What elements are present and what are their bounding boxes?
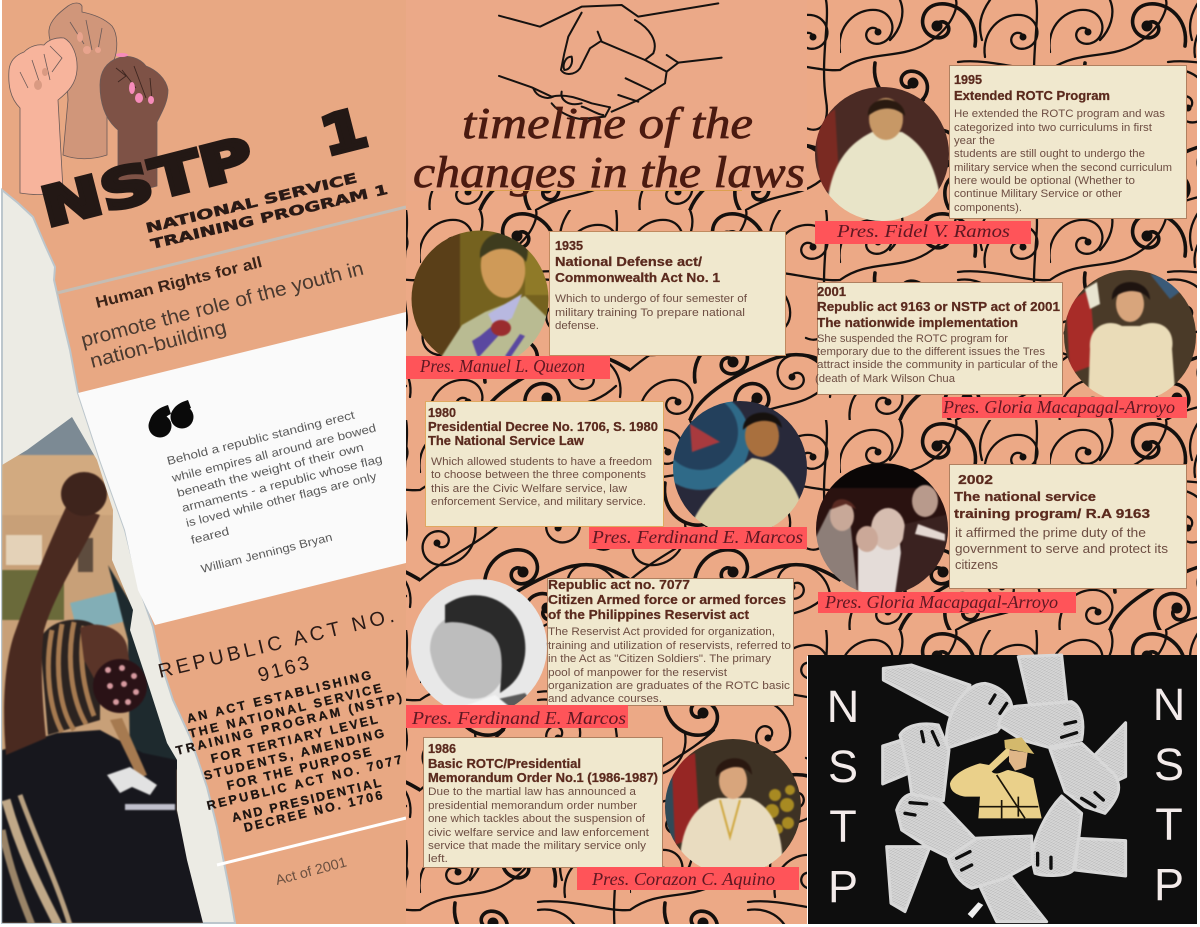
card: text: (death of Mark Wilson Chua [815, 373, 956, 385]
text: NSTP left [827, 681, 859, 912]
divider [57, 207, 406, 293]
card: text: She suspended the ROTC program for [817, 333, 1008, 345]
text: NSTP left: P [828, 861, 858, 912]
card: text [550, 232, 786, 356]
photo: Arroyo oath-taking group [816, 463, 948, 592]
text: act description: STUDENTS, AMENDING [202, 726, 386, 783]
name band: Ramos [815, 221, 1031, 244]
card: text: defense. [555, 320, 599, 332]
heading: human rights for all: Human Rights for all [94, 254, 264, 312]
card: text: training and utilization of reservists, referred to [548, 640, 791, 652]
card: text: presidential memorandum order number [428, 800, 637, 812]
card: text: attract inside the community in particular of the [817, 359, 1058, 371]
card: text: Presidential Decree No. 1706, S. 1980 [428, 420, 658, 434]
card: text: 1935 [555, 239, 583, 253]
card: text: Basic ROTC/Presidential [428, 757, 581, 771]
title: NSTP 1: NSTP [35, 125, 260, 240]
card: Republic act no. 7077 [406, 578, 794, 728]
text: act description: AN ACT ESTABLISHING [185, 668, 372, 726]
card: text: government to serve and protect its [955, 541, 1169, 556]
card: text [950, 66, 1186, 218]
card: text: categorized into two curriculums in first [954, 122, 1152, 134]
subtitle: national service training program [144, 170, 389, 253]
text: quotation: feared [190, 526, 231, 547]
text: act description: REPUBLIC ACT NO. 7077 [205, 753, 403, 813]
card: text: continue Military Service or other [954, 188, 1122, 200]
card: text: Citizen Armed force or armed forces [548, 593, 786, 607]
text: promote the role of the youth: promote the role of the youth in [79, 258, 366, 352]
illustration: linked hands [883, 655, 1126, 922]
card: text: pool of manpower for the reservist [548, 667, 727, 679]
subtitle: national service training program: NATIONAL SERVICE [144, 170, 359, 237]
panel: timeline middle [406, 0, 810, 924]
card: text: citizens [955, 557, 998, 572]
panel: timeline right [807, 0, 1200, 656]
card: text [815, 282, 1062, 394]
card: text: enforcement Service, and military service. [431, 496, 646, 508]
subtitle: national service training program: TRAINING PROGRAM 1 [149, 182, 389, 253]
text: quotation: armaments - a republic whose flag [181, 453, 384, 515]
text: NSTP left: N [827, 681, 859, 732]
card: text: organization are graduates of the ROTC basic [548, 680, 791, 692]
card: text: it affirmed the prime duty of the [955, 525, 1146, 540]
title: timeline of the changes in the laws [413, 99, 805, 197]
card: text [950, 464, 1186, 588]
card: text: The nationwide implementation [817, 316, 1018, 330]
photo: Ferdinand E. Marcos painting [673, 401, 807, 527]
card: text [424, 738, 662, 868]
photo: Manuel L. Quezon [412, 230, 548, 356]
text: act description: FOR THE PURPOSE [225, 745, 373, 793]
card: text: Republic act no. 7077 [548, 578, 690, 592]
card: text: The National Service Law [428, 434, 584, 448]
card: text: temporary due to the different issues the Tres [817, 346, 1046, 358]
name band: Quezon: Pres. Manuel L. Quezon [419, 356, 585, 376]
text: NSTP left: T [829, 801, 857, 852]
card: text: to choose between the three components [431, 469, 647, 481]
card: text: 1986 [428, 742, 456, 756]
text: act description [174, 668, 403, 835]
card: text: 2002 [958, 473, 993, 487]
panel: NSTP black image [808, 655, 1197, 924]
icon: quotation mark [148, 400, 194, 438]
text: NSTP right: S [1154, 739, 1184, 790]
text: quotation: while empires all around are bowed [170, 422, 377, 485]
card: text: here would be optional (Whether to [954, 175, 1135, 187]
card: text: Due to the martial law has announced a [428, 786, 637, 798]
text: promote the role of the youth: nation-building [88, 316, 229, 373]
card: text: Extended ROTC Program [954, 89, 1110, 103]
card: text: 1995 [954, 73, 982, 87]
card: 1980 Marcos [426, 390, 810, 549]
card: 1995 Ramos [810, 66, 1186, 244]
card: text: Republic act 9163 or NSTP act of 2001 [817, 300, 1060, 314]
card: text: this are the Civic Welfare service, law [431, 483, 627, 495]
card: text: The national service [954, 490, 1096, 504]
card: text: components). [954, 202, 1022, 214]
title: NSTP 1 [35, 96, 374, 240]
card: text: training program/ R.A 9163 [954, 507, 1150, 521]
name band: Marcos: Pres. Ferdinand E. Marcos [411, 708, 626, 728]
card: 1935 Quezon [406, 225, 786, 379]
card: text: National Defense act/ [555, 255, 703, 269]
photo: Fidel V. Ramos [815, 87, 949, 221]
text: NSTP right: N [1153, 679, 1185, 730]
panel: left cover [2, 0, 406, 927]
icon: handshake line art [499, 3, 722, 119]
text: NSTP right: T [1155, 799, 1183, 850]
text: act description: DECREE NO. 1706 [242, 788, 384, 835]
card: text [548, 578, 794, 706]
name band: Arroyo: Pres. Gloria Macapagal-Arroyo [824, 592, 1058, 612]
card: 2002 Arroyo [812, 463, 1186, 613]
card: 2001 Arroyo [815, 266, 1200, 418]
title: timeline of the changes in the laws: timeline of the [462, 99, 753, 148]
text: act description: FOR TERTIARY LEVEL [209, 712, 379, 766]
photo: Marcos black and white portrait [411, 579, 547, 705]
card: text: in the Act as "Citizen Soldiers". The primary [548, 653, 772, 665]
title: timeline of the changes in the laws: changes in the laws [413, 148, 805, 197]
card: text: 2001 [817, 285, 846, 299]
name band: Aquino: Pres. Corazon C. Aquino [591, 869, 775, 889]
text: quotation: beneath the weight of their own [176, 442, 365, 500]
title: NSTP 1: 1 [314, 96, 374, 168]
text: act description: THE NATIONAL SERVICE [187, 681, 383, 741]
heading: republic act no. 9163: REPUBLIC ACT NO. [156, 605, 396, 683]
text: quotation: Behold a republic standing erect [166, 409, 357, 468]
card: text: military training To prepare national [555, 307, 745, 319]
card: text: and advance courses. [548, 693, 662, 705]
text: NSTP right [1153, 679, 1185, 910]
text: NSTP left: S [828, 741, 858, 792]
photo: protester with raised fist [2, 417, 203, 923]
card: text: 1980 [428, 406, 456, 420]
name band: Arroyo: Pres. Gloria Macapagal-Arroyo [942, 397, 1175, 417]
name band: Ramos: Pres. Fidel V. Ramos [836, 221, 1010, 241]
card: text: left. [428, 853, 448, 865]
panel: quote background [78, 312, 406, 625]
card: text: students are still ought to undergo the [954, 148, 1145, 160]
card: text: Which to undergo of four semester of [555, 293, 748, 305]
text: quotation: is loved while other flags are only [185, 471, 378, 530]
text: quotation [166, 409, 384, 576]
torn paper edge [2, 190, 235, 923]
card: text: one which tackles about the suspension of [428, 813, 646, 825]
card: text: He extended the ROTC program and was [954, 108, 1166, 120]
card: text: civic welfare service and law enforcement [428, 827, 649, 839]
icon: three raised fists [9, 3, 168, 195]
name band: Marcos: Pres. Ferdinand E. Marcos [591, 527, 803, 547]
text: quotation: William Jennings Bryan [200, 532, 334, 576]
text: act description: AND PRESIDENTIAL [230, 776, 383, 825]
heading: republic act no. 9163: 9163 [256, 652, 312, 687]
card: text: military service when the second curriculum [954, 162, 1172, 174]
card: text: service that made the military service only [428, 840, 647, 852]
text: act of 2001: Act of 2001 [274, 853, 349, 888]
card: text: year the [954, 135, 995, 147]
icon: saluting soldier [950, 737, 1042, 818]
photo: Corazon C. Aquino [665, 739, 801, 867]
text: NSTP right: P [1154, 859, 1184, 910]
photo: Gloria Macapagal-Arroyo portrait [1064, 270, 1196, 397]
card: 1986 Aquino [424, 735, 805, 890]
card: text: The Reservist Act provided for organization, [548, 626, 775, 638]
card: text: Memorandum Order No.1 (1986-1987) [428, 771, 658, 785]
card: text: Commonwealth Act No. 1 [555, 271, 720, 285]
card: text: Which allowed students to have a freedom [431, 456, 652, 468]
card: text [426, 402, 664, 526]
card: text: of the Philippines Reservist act [548, 608, 750, 622]
text: act description: TRAINING PROGRAM (NSTP) [174, 690, 403, 758]
